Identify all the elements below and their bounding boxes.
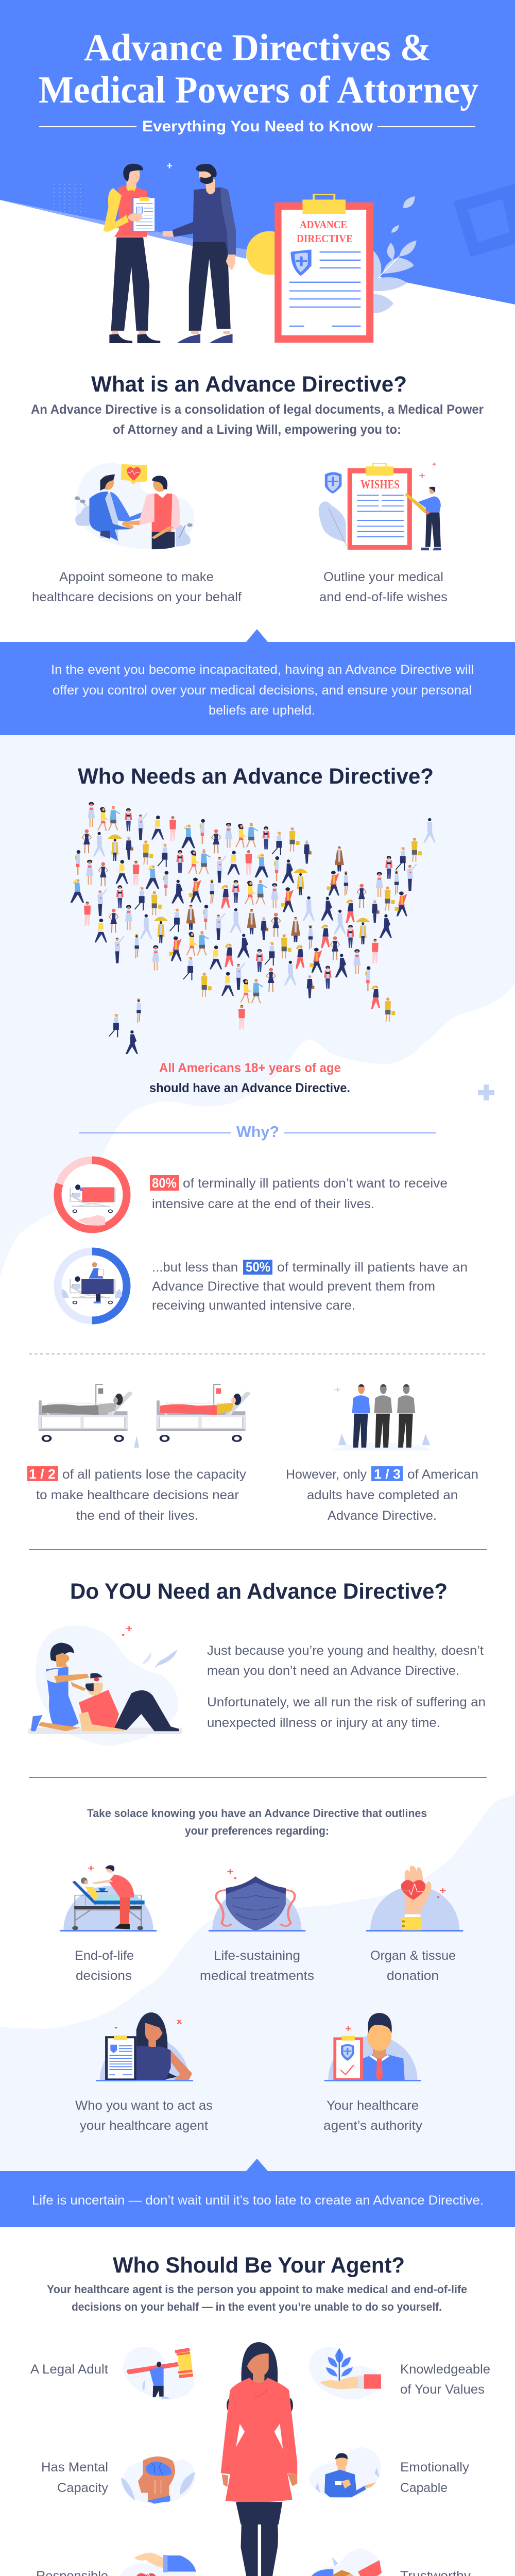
icon: hands protecting heart <box>116 2552 196 2576</box>
label: Who you want to act as <box>75 2098 213 2113</box>
label: Life-sustaining <box>214 1948 300 1963</box>
caption: appoint: Appoint someone to make <box>59 570 214 584</box>
icon: hand with plant <box>309 2347 381 2400</box>
illustration: wishes clipboard <box>319 463 441 550</box>
intro text: An Advance Directive is a consolidation of legal documents, a Medical Power <box>31 402 484 417</box>
plant and yellow circle <box>246 196 417 313</box>
intro text <box>87 1807 427 1837</box>
stat text: one half: of all patients lose the capacity <box>62 1467 247 1482</box>
trait: has mental capacity: Capacity <box>57 2481 109 2495</box>
item: healthcare agent authority <box>323 2013 423 2133</box>
illustration: central woman <box>221 2342 297 2524</box>
intro text: of Attorney and a Living Will, empowering you to: <box>113 422 401 437</box>
trait: emotionally capable: Capable <box>400 2481 448 2495</box>
trait: trustworthy <box>309 2549 471 2576</box>
stat text: 80 percent: intensive care at the end of their lives. <box>152 1197 374 1211</box>
stat text: 50 percent <box>152 1259 468 1313</box>
stat text: 50 percent: Advance Directive that would prevent them from <box>152 1279 435 1294</box>
icon: plus <box>478 1084 494 1100</box>
map caption: should have an Advance Directive. <box>149 1081 350 1095</box>
donut chart: 50 percent <box>58 1251 127 1320</box>
intro text: your preferences regarding: <box>185 1824 329 1837</box>
icon: gavel <box>123 2347 195 2400</box>
body text <box>207 1643 486 1730</box>
section: what is an advance directive <box>31 372 484 604</box>
caption: outline: and end-of-life wishes <box>319 590 448 604</box>
stat text: one third: However, only <box>286 1467 367 1482</box>
label: medical treatments <box>200 1969 314 1983</box>
trait: emotionally capable: Emotionally <box>400 2460 470 2475</box>
header panel <box>0 0 515 343</box>
stat text: 80 percent <box>150 1175 448 1211</box>
stat text: one third: 1 / 3 <box>374 1466 401 1482</box>
intro text: Your healthcare agent is the person you appoint to make medical and end-of-life <box>47 2283 467 2296</box>
stat text: 50 percent: 50% <box>246 1259 270 1275</box>
label <box>75 1948 134 1983</box>
title: Medical Powers of Attorney <box>39 69 478 111</box>
label: donation <box>387 1969 439 1983</box>
intro text: decisions on your behalf — in the event you’re unable to do so yourself. <box>72 2300 442 2313</box>
body text: mean you don’t need an Advance Directive. <box>207 1664 459 1678</box>
stat text: 50 percent: ...but less than <box>152 1260 238 1275</box>
label: your healthcare agent <box>80 2119 208 2133</box>
label <box>370 1948 456 1983</box>
donut chart: 80 percent <box>58 1160 127 1229</box>
section: do you need an advance directive <box>28 1579 487 1778</box>
body text: unexpected illness or injury at any time. <box>207 1716 440 1730</box>
map of people shaped as the usa <box>70 802 436 1054</box>
heading: Who Should Be Your Agent? <box>113 2253 405 2278</box>
intro text: Take solace knowing you have an Advance Directive that outlines <box>87 1807 427 1820</box>
stat text: one half <box>27 1466 247 1523</box>
map caption <box>149 1061 350 1095</box>
icon: handshake <box>309 2549 382 2576</box>
clipboard label <box>297 218 353 245</box>
callout: incapacitated: offer you control over your medical decisions, and ensure your personal <box>53 683 472 698</box>
caption: appoint <box>32 570 242 604</box>
callout: life is uncertain: Life is uncertain — don’t wait until it’s too late to create an Advance Directive. <box>32 2193 484 2208</box>
man with beard <box>163 164 236 343</box>
trait: knowledgeable of your values: of Your Values <box>400 2382 485 2397</box>
callout: incapacitated <box>0 629 515 735</box>
trait: has mental capacity <box>41 2456 195 2504</box>
stat text: one third: of American <box>407 1467 478 1482</box>
icon: head with brain <box>121 2456 195 2504</box>
label: agent’s authority <box>323 2119 423 2133</box>
illustration: appoint someone <box>75 463 195 549</box>
trait: knowledgeable of your values <box>309 2347 490 2400</box>
label: decisions <box>76 1969 132 1983</box>
stat text: one third <box>286 1466 478 1523</box>
label <box>323 2098 423 2133</box>
illustration: central woman legs <box>241 2524 278 2576</box>
stat text: one third: Advance Directive. <box>328 1509 437 1523</box>
label: Organ & tissue <box>370 1948 456 1963</box>
stat text: one half: to make healthcare decisions near <box>36 1488 239 1502</box>
stat text: one half: 1 / 2 <box>29 1466 56 1482</box>
label <box>200 1948 314 1983</box>
icon: man with hand on heart <box>309 2447 381 2500</box>
man with clipboard <box>104 164 160 343</box>
body text: Just because you’re young and healthy, doesn’t <box>207 1643 484 1658</box>
heading: Who Needs an Advance Directive? <box>78 764 434 789</box>
heading: Do YOU Need an Advance Directive? <box>70 1579 448 1604</box>
callout: incapacitated: beliefs are upheld. <box>209 703 315 718</box>
item: end of life decisions <box>60 1865 157 1983</box>
illustration: three adults <box>332 1384 432 1451</box>
section: preferences <box>0 1794 515 2171</box>
label: End-of-life <box>75 1948 134 1963</box>
stat text: 80 percent: 80% <box>152 1175 177 1191</box>
caption: outline: Outline your medical <box>323 570 443 584</box>
clipboard label: DIRECTIVE <box>297 232 353 245</box>
trait: has mental capacity: Has Mental <box>41 2460 108 2475</box>
stat text: 50 percent: of terminally ill patients have an <box>277 1260 468 1275</box>
wave background <box>0 1794 515 2171</box>
label: Your healthcare <box>327 2098 419 2113</box>
body text: Unfortunately, we all run the risk of suffering an <box>207 1695 486 1709</box>
trait: knowledgeable of your values: Knowledgeable <box>400 2362 490 2377</box>
intro text <box>47 2283 467 2313</box>
trait: a legal adult <box>30 2347 195 2400</box>
subtitle: Everything You Need to Know <box>142 118 373 135</box>
map caption: All Americans 18+ years of age <box>159 1061 341 1075</box>
stat text: one half: the end of their lives. <box>76 1509 198 1523</box>
illustration: two men and clipboard <box>0 163 515 343</box>
illustration: two patients in beds <box>39 1384 248 1448</box>
section: who needs an advance directive <box>0 735 515 1550</box>
clipboard heading: wishes: WISHES <box>360 478 400 492</box>
item: life sustaining treatments <box>200 1869 314 1983</box>
clipboard label: ADVANCE <box>300 218 347 231</box>
caption: appoint: healthcare decisions on your behalf <box>32 590 242 604</box>
item: organ and tissue donation <box>366 1866 463 1983</box>
section: who should be your agent <box>30 2253 490 2576</box>
item: who you want to act as agent <box>75 2012 213 2133</box>
illustration: woman bandaging injured man <box>28 1625 182 1746</box>
section background <box>0 735 515 1277</box>
trait: responsible <box>36 2552 196 2576</box>
trait: a legal adult: A Legal Adult <box>30 2362 108 2377</box>
heading: What is an Advance Directive? <box>91 372 407 397</box>
title <box>39 27 478 111</box>
clipboard: advance directive <box>274 195 373 343</box>
intro text <box>31 402 484 437</box>
title: Advance Directives & <box>84 27 431 69</box>
caption: outline <box>319 570 448 604</box>
trait: emotionally capable <box>309 2447 470 2500</box>
stat text: one third: adults have completed an <box>307 1488 458 1502</box>
why divider: Why? <box>236 1123 279 1141</box>
stat text: 50 percent: receiving unwanted intensive care. <box>152 1298 355 1313</box>
callout: incapacitated: In the event you become incapacitated, having an Advance Directive will <box>51 663 474 677</box>
label <box>75 2098 213 2133</box>
stat text: 80 percent: of terminally ill patients don’t want to receive <box>183 1176 448 1191</box>
callout: life is uncertain <box>0 2159 515 2227</box>
header background <box>0 0 515 304</box>
